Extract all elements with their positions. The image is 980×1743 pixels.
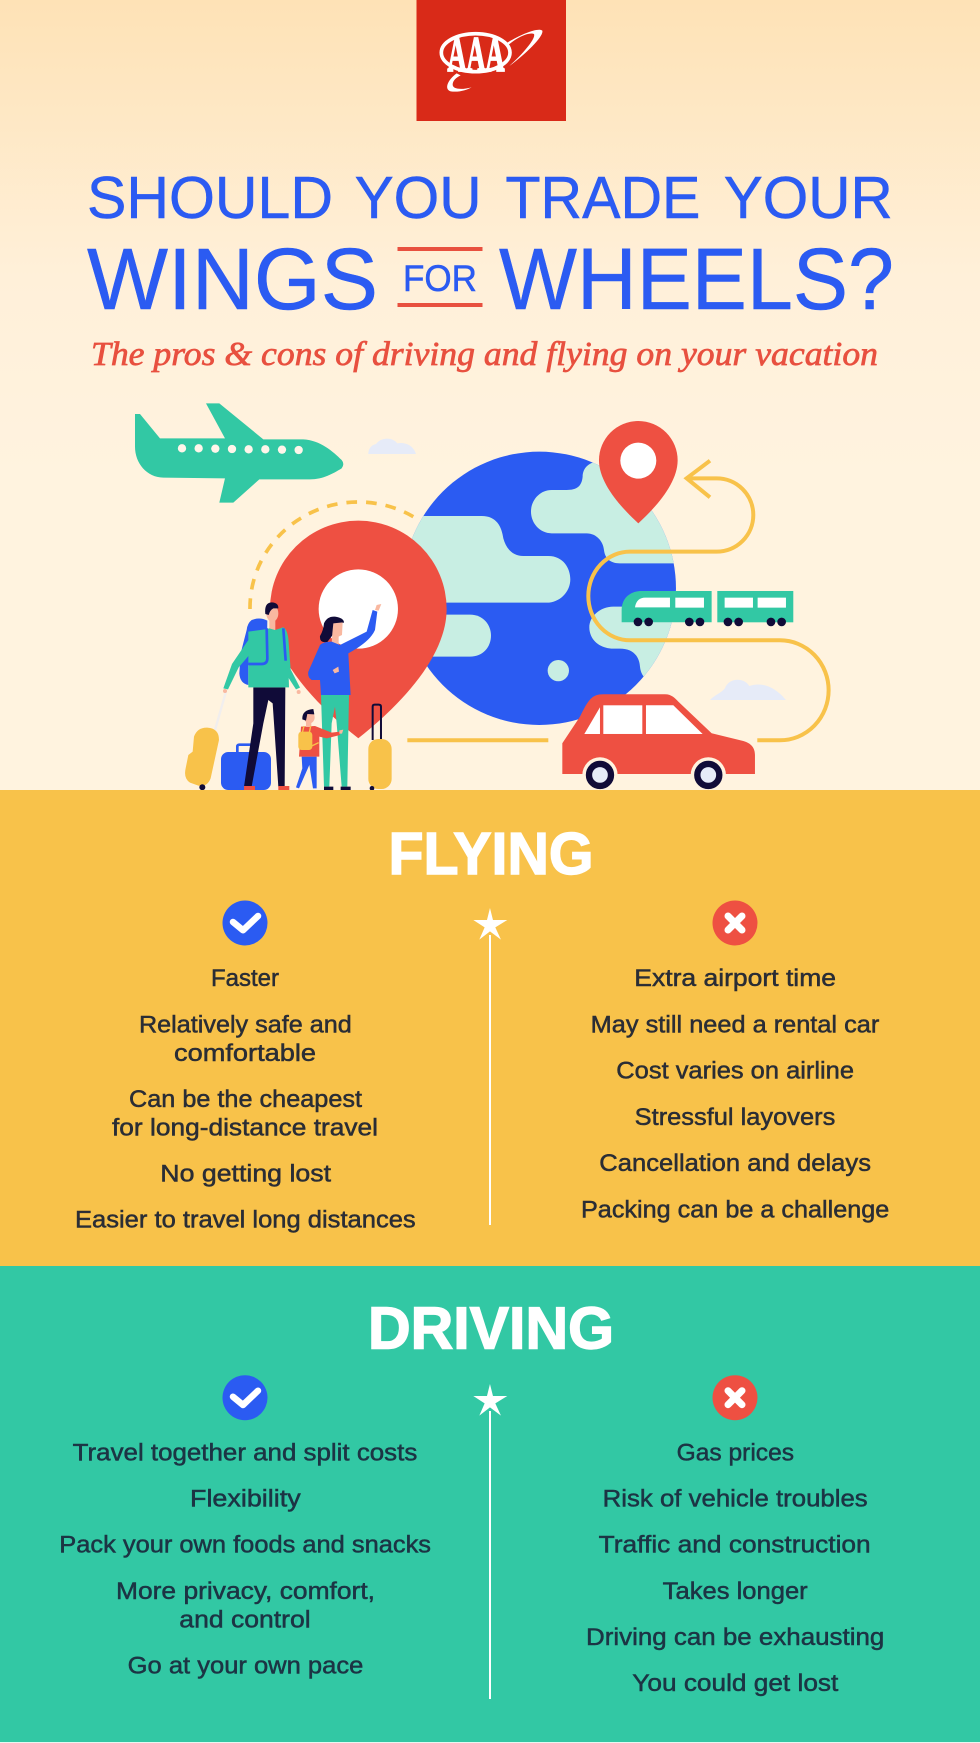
list: driving cons: Takes longer bbox=[663, 1578, 808, 1605]
icon: airplane bbox=[135, 403, 343, 503]
list: driving pros: Flexibility bbox=[190, 1486, 301, 1513]
people and luggage bbox=[221, 602, 392, 791]
title: FOR bbox=[403, 258, 477, 299]
list: driving pros: Go at your own pace bbox=[128, 1653, 363, 1680]
list: driving pros: More privacy, comfort, bbox=[116, 1578, 375, 1605]
title: TRADE bbox=[505, 165, 700, 231]
list: driving pros: Pack your own foods and snacks bbox=[59, 1532, 431, 1559]
icon: cross bbox=[712, 1375, 758, 1420]
list: driving cons: Traffic and construction bbox=[599, 1532, 871, 1559]
list: flying cons: May still need a rental car bbox=[591, 1012, 879, 1039]
panel: flying bbox=[0, 790, 980, 1266]
title: YOUR bbox=[724, 165, 893, 231]
list: flying cons: Cost varies on airline bbox=[616, 1058, 854, 1085]
title: YOU bbox=[355, 165, 482, 231]
title: SHOULD bbox=[87, 165, 333, 231]
divider: star and line bbox=[473, 908, 507, 1225]
icon: blue bag bbox=[221, 745, 271, 790]
list: flying pros: Faster bbox=[211, 965, 279, 992]
list: flying pros: comfortable bbox=[174, 1040, 316, 1067]
figure: woman bbox=[308, 604, 381, 790]
figure: child bbox=[296, 709, 343, 788]
list: flying cons: Extra airport time bbox=[634, 965, 836, 992]
list: flying pros bbox=[75, 965, 416, 1234]
list: flying pros: for long-distance travel bbox=[112, 1115, 378, 1142]
list: driving cons bbox=[586, 1440, 884, 1697]
icon: large cloud bbox=[710, 680, 786, 700]
icon: left suitcase bbox=[185, 692, 226, 790]
icon: check bbox=[222, 1375, 268, 1420]
list: flying pros: No getting lost bbox=[160, 1161, 331, 1188]
list: flying pros: Easier to travel long distances bbox=[75, 1207, 416, 1234]
logo: AAA: AAA bbox=[447, 26, 505, 82]
panel: driving bbox=[0, 1266, 980, 1742]
route: winding road bbox=[407, 461, 829, 740]
list: driving cons: You could get lost bbox=[632, 1670, 839, 1697]
list: driving pros: Travel together and split costs bbox=[73, 1440, 417, 1467]
icon: small cloud bbox=[368, 439, 416, 454]
icon: check bbox=[222, 900, 268, 946]
icon: large map pin bbox=[270, 521, 447, 738]
illustration: travel scene bbox=[135, 403, 829, 793]
subtitle: The pros & cons of driving and flying on your vacation bbox=[91, 336, 878, 373]
icon: right suitcase bbox=[368, 705, 392, 791]
icon: cross bbox=[712, 900, 758, 946]
list: flying pros: Can be the cheapest bbox=[129, 1086, 362, 1113]
title: WINGS bbox=[87, 231, 378, 328]
list: driving pros bbox=[59, 1440, 431, 1680]
globe bbox=[412, 452, 676, 725]
list: flying cons bbox=[581, 965, 889, 1223]
figure: man bbox=[223, 602, 301, 790]
icon: train bbox=[622, 591, 793, 626]
icon: car bbox=[562, 694, 755, 793]
list: flying cons: Cancellation and delays bbox=[599, 1150, 871, 1177]
heading: driving: DRIVING bbox=[368, 1296, 614, 1362]
list: driving cons: Risk of vehicle troubles bbox=[603, 1486, 868, 1513]
list: driving pros: and control bbox=[179, 1606, 311, 1633]
icon: small map pin bbox=[599, 421, 678, 523]
logo: AAA bbox=[416, 0, 566, 121]
list: flying cons: Stressful layovers bbox=[635, 1104, 835, 1131]
divider: star and line bbox=[473, 1384, 507, 1699]
list: driving cons: Driving can be exhausting bbox=[586, 1624, 884, 1651]
list: flying cons: Packing can be a challenge bbox=[581, 1196, 889, 1223]
title: WHEELS? bbox=[499, 231, 894, 328]
flight path: dashed arc bbox=[250, 502, 413, 609]
list: driving cons: Gas prices bbox=[677, 1440, 794, 1467]
list: flying pros: Relatively safe and bbox=[139, 1012, 352, 1039]
heading: flying: FLYING bbox=[388, 821, 594, 887]
title bbox=[87, 165, 894, 328]
